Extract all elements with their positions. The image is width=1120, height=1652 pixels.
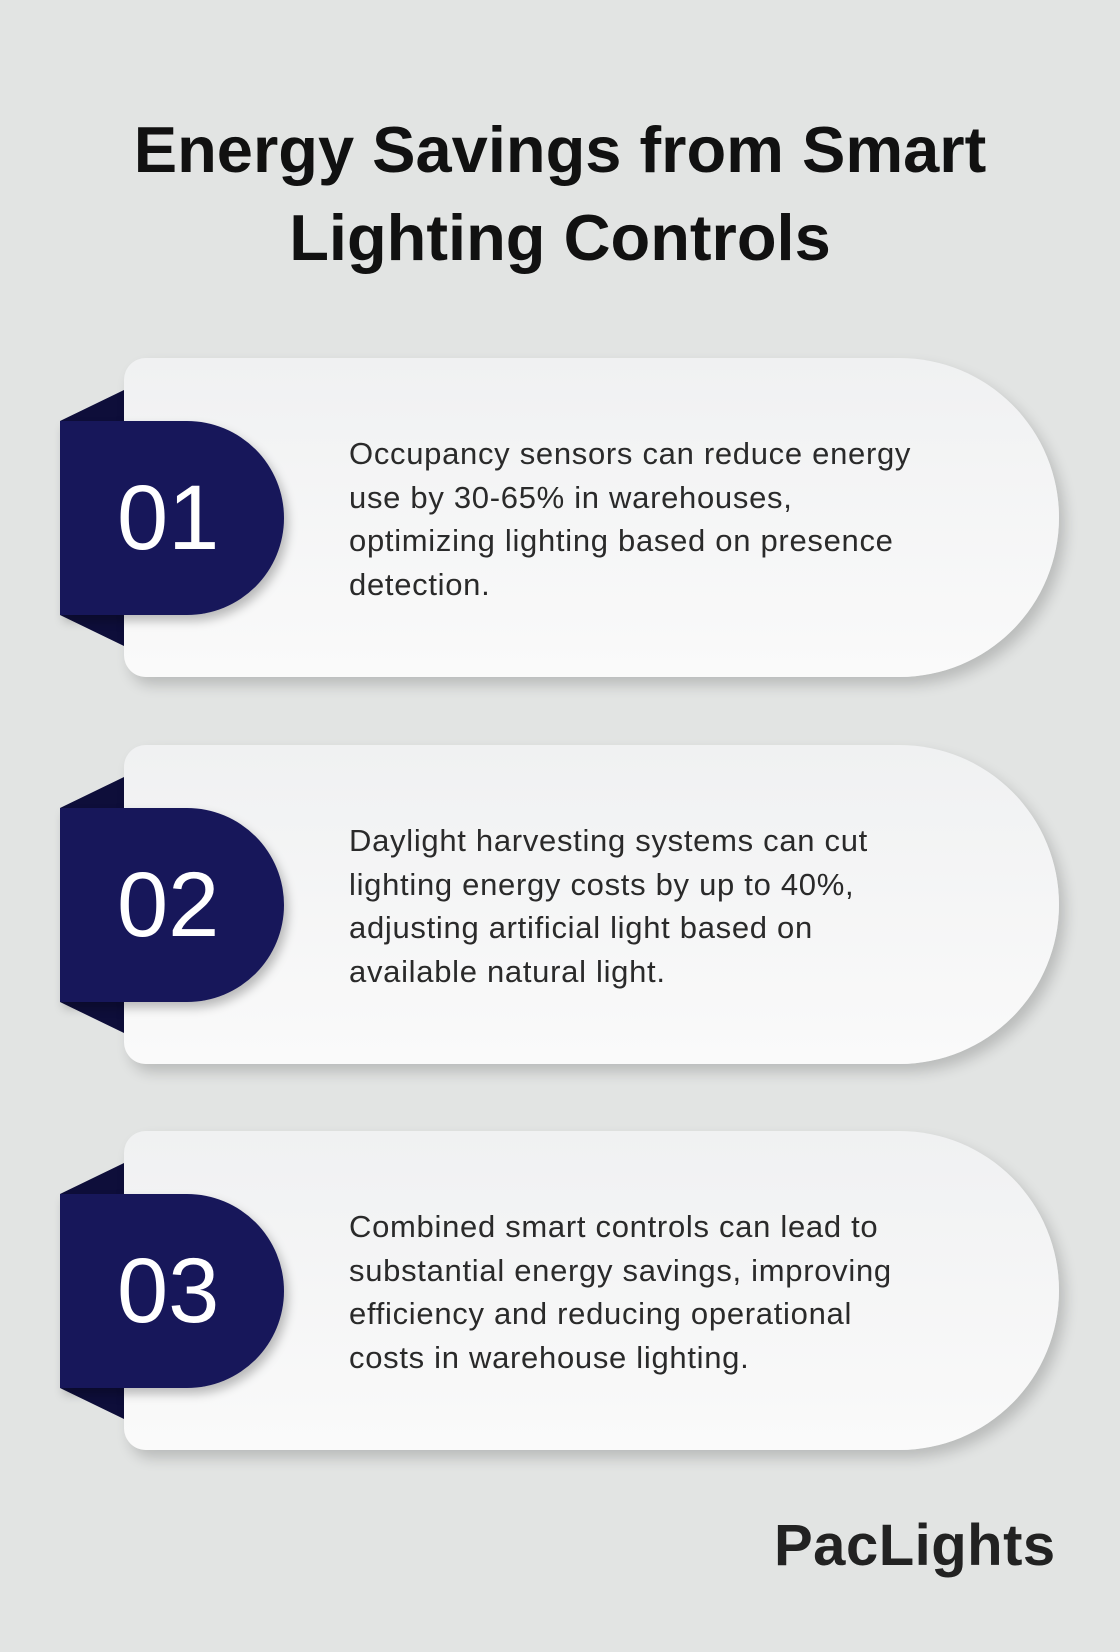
panel: item 2 xyxy=(58,745,1070,1078)
panel: item 3 xyxy=(58,1131,1070,1464)
text: Daylight harvesting systems can cut lighting energy costs by up to 40%, adjusting artificial light based on available natural light. xyxy=(349,823,868,989)
number badge: 01 xyxy=(117,467,219,569)
fold top xyxy=(60,777,124,808)
number badge: 02 xyxy=(117,854,219,956)
title xyxy=(134,113,986,274)
text: Combined smart controls can lead to substantial energy savings, improving efficiency and reducing operational costs in warehouse lighting. xyxy=(349,1209,892,1375)
title: Energy Savings from Smart xyxy=(134,113,986,186)
number badge xyxy=(60,808,284,1002)
card xyxy=(124,1131,1059,1450)
fold bottom xyxy=(60,1388,124,1419)
panel: item 1 xyxy=(58,358,1070,691)
fold top xyxy=(60,390,124,421)
card xyxy=(124,358,1059,677)
card xyxy=(124,745,1059,1064)
fold bottom xyxy=(60,1002,124,1033)
number badge: 03 xyxy=(117,1240,219,1342)
title: Lighting Controls xyxy=(289,201,831,274)
fold bottom xyxy=(60,615,124,646)
text: Occupancy sensors can reduce energy use by 30-65% in warehouses, optimizing lighting based on presence detection. xyxy=(349,436,911,602)
number badge xyxy=(60,421,284,615)
fold top xyxy=(60,1163,124,1194)
logo: PacLights xyxy=(774,1513,1056,1578)
number badge xyxy=(60,1194,284,1388)
